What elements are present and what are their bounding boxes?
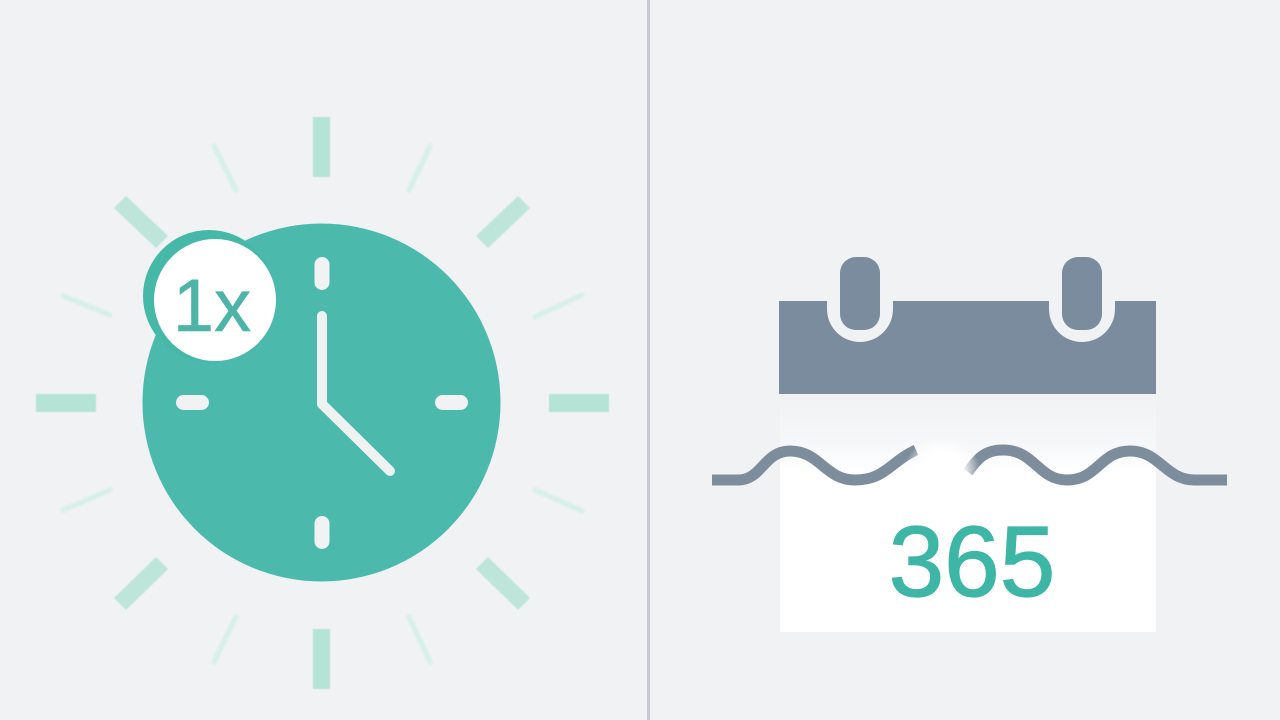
glow above page bbox=[780, 394, 1156, 474]
clock face bbox=[142, 224, 500, 582]
day number: 365 bbox=[889, 506, 1055, 618]
binding rings bbox=[827, 257, 1115, 342]
sunburst rays bbox=[36, 117, 609, 689]
calendar page bbox=[780, 474, 1156, 632]
panel: clock bbox=[36, 117, 609, 689]
panel: calendar bbox=[712, 257, 1227, 632]
badge: 1x bbox=[143, 230, 276, 362]
tear gap bbox=[904, 438, 980, 502]
badge: 1x: 1x bbox=[173, 264, 251, 347]
clock hands bbox=[322, 316, 390, 471]
hour ticks bbox=[176, 257, 468, 549]
torn wavy edge bbox=[712, 450, 1227, 480]
calendar header bbox=[779, 301, 1156, 394]
center divider bbox=[647, 0, 650, 720]
